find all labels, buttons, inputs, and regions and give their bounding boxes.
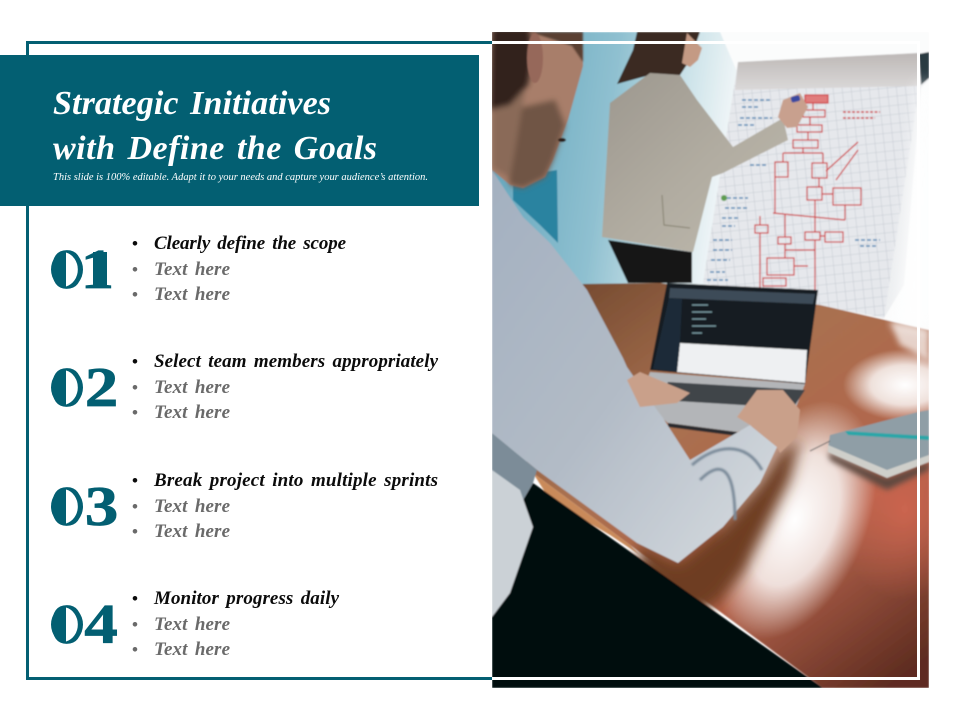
bullets 04: Monitor progress daily [153,588,340,609]
item 03 [50,470,438,542]
bullets 04 [132,588,340,660]
item 02 [50,351,439,423]
item 01 [50,233,347,305]
man: dark foreground [492,483,823,688]
item 04 [50,588,340,660]
number 01: 01 [50,239,114,301]
bullets 03: Break project into multiple sprints [153,470,438,491]
teal outline frame [28,42,492,678]
bullets 03: Text here [154,496,231,517]
bullets 04: Text here [154,639,231,660]
bullets 04: Text here [154,614,231,635]
bullets 01: Text here [154,284,231,305]
title [53,85,377,167]
notebook and pen [810,410,929,490]
number 04: 04 [50,594,118,656]
bullets 04: • [132,640,138,659]
bullets 02: Text here [154,377,231,398]
bullets 03: • [132,497,138,516]
right edge wash [895,80,929,330]
bullets 01: • [132,234,138,253]
man: head [490,28,583,188]
bullets 02: • [132,378,138,397]
bullets 03: • [132,471,138,490]
bullets 02 [132,351,439,423]
bullets 01: Clearly define the scope [154,233,347,254]
bullets 01: • [132,285,138,304]
bullets 01 [132,233,347,305]
photo background wall [706,52,929,322]
table [492,283,929,688]
bullets 03: • [132,522,138,541]
number 03: 03 [50,476,118,538]
laptop [640,283,818,436]
bullets 03: Text here [154,521,231,542]
man: hands [627,372,800,453]
bullets 03 [132,470,438,542]
bullets 04: • [132,615,138,634]
flip chart [690,52,930,325]
title banner [0,55,479,206]
bullets 01: Text here [154,259,231,280]
woman at flip chart [602,32,808,283]
bullets 04: • [132,589,138,608]
bullets 02: • [132,403,138,422]
bullets 02: Text here [154,402,231,423]
subtitle: This slide is 100% editable. Adapt it to your needs and capture your audience’s attention. [53,172,428,183]
white inner frame over photo [492,42,918,678]
bullets 01: • [132,260,138,279]
number 02: 02 [50,357,118,419]
bullets 02: Select team members appropriately [154,351,439,372]
title: Strategic Initiatives [53,85,331,122]
bullets 02: • [132,352,138,371]
photo: team at work [490,28,960,688]
man: shirt [492,170,777,617]
title: with Define the Goals [53,130,377,167]
